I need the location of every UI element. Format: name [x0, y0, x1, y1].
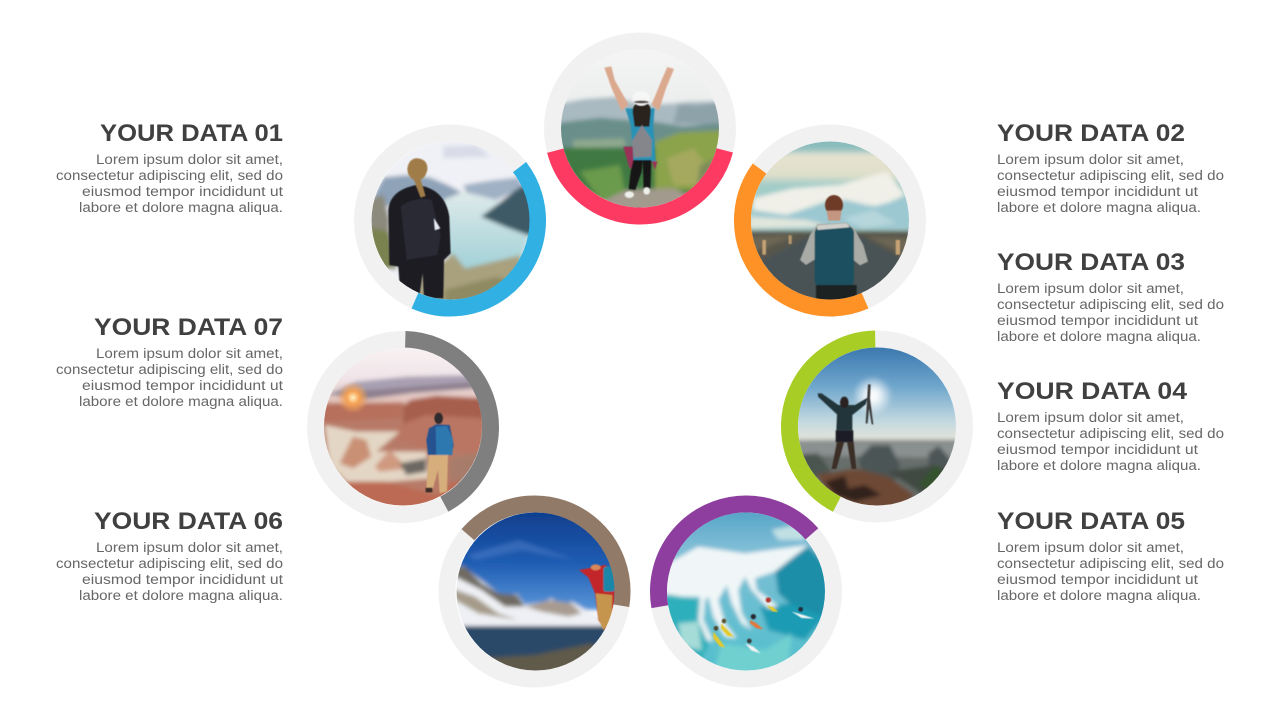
text: your data 02: Lorem ipsum dolor sit amet, — [997, 152, 1184, 167]
text: your data 07: Lorem ipsum dolor sit amet, — [96, 346, 283, 361]
text: your data 01: labore et dolore magna aliqua. — [79, 200, 283, 215]
text: your data 02: consectetur adipiscing elit, sed do — [997, 168, 1224, 183]
text: your data 07: consectetur adipiscing elit, sed do — [56, 362, 283, 377]
text: your data 05: Lorem ipsum dolor sit amet, — [997, 540, 1184, 555]
text: your data 05: eiusmod tempor incididunt ut — [997, 572, 1198, 587]
text: your data 01: Lorem ipsum dolor sit amet, — [96, 152, 283, 167]
text: your data 01: eiusmod tempor incididunt ut — [82, 184, 283, 199]
text: your data 05: consectetur adipiscing elit, sed do — [997, 556, 1224, 571]
text: your data 04: eiusmod tempor incididunt ut — [997, 442, 1198, 457]
circle: photo with blue arc — [354, 124, 546, 316]
text: your data 05: YOUR DATA 05 — [997, 508, 1185, 535]
text: your data 04: Lorem ipsum dolor sit amet, — [997, 410, 1184, 425]
text: your data 04 — [997, 378, 1224, 473]
text: your data 06: consectetur adipiscing elit, sed do — [56, 556, 283, 571]
text: your data 04: YOUR DATA 04 — [997, 378, 1187, 405]
text: your data 01: consectetur adipiscing elit, sed do — [56, 168, 283, 183]
text: your data 04: labore et dolore magna aliqua. — [997, 458, 1201, 473]
text: your data 02: eiusmod tempor incididunt ut — [997, 184, 1198, 199]
text: your data 02: labore et dolore magna aliqua. — [997, 200, 1201, 215]
circle: photo with purple arc — [650, 496, 842, 688]
text: your data 07 — [56, 314, 283, 409]
text: your data 04: consectetur adipiscing elit, sed do — [997, 426, 1224, 441]
text: your data 07: eiusmod tempor incididunt ut — [82, 378, 283, 393]
text: your data 06: YOUR DATA 06 — [94, 508, 283, 535]
text: your data 05 — [997, 508, 1224, 603]
text: your data 03: YOUR DATA 03 — [997, 249, 1185, 276]
circle: photo with grey arc — [313, 337, 493, 517]
circle: photo with brown arc — [438, 496, 631, 688]
circle: photo with green arc — [781, 330, 973, 522]
text: your data 07: YOUR DATA 07 — [94, 314, 283, 341]
text: your data 03 — [997, 249, 1224, 344]
text: your data 02: YOUR DATA 02 — [997, 120, 1185, 147]
circle: top photo with red arc — [544, 32, 736, 224]
text: your data 07: labore et dolore magna aliqua. — [79, 394, 283, 409]
text: your data 03: Lorem ipsum dolor sit amet, — [997, 281, 1184, 296]
text: your data 06 — [56, 508, 283, 603]
text: your data 06: eiusmod tempor incididunt ut — [82, 572, 283, 587]
text: your data 03: labore et dolore magna aliqua. — [997, 329, 1201, 344]
text: your data 05: labore et dolore magna aliqua. — [997, 588, 1201, 603]
text: your data 01 — [56, 120, 283, 215]
text: your data 03: consectetur adipiscing elit, sed do — [997, 297, 1224, 312]
text: your data 06: labore et dolore magna aliqua. — [79, 588, 283, 603]
text: your data 06: Lorem ipsum dolor sit amet, — [96, 540, 283, 555]
text: your data 03: eiusmod tempor incididunt ut — [997, 313, 1198, 328]
circle: photo with orange arc — [734, 124, 926, 316]
text: your data 01: YOUR DATA 01 — [100, 120, 283, 147]
text: your data 02 — [997, 120, 1224, 215]
